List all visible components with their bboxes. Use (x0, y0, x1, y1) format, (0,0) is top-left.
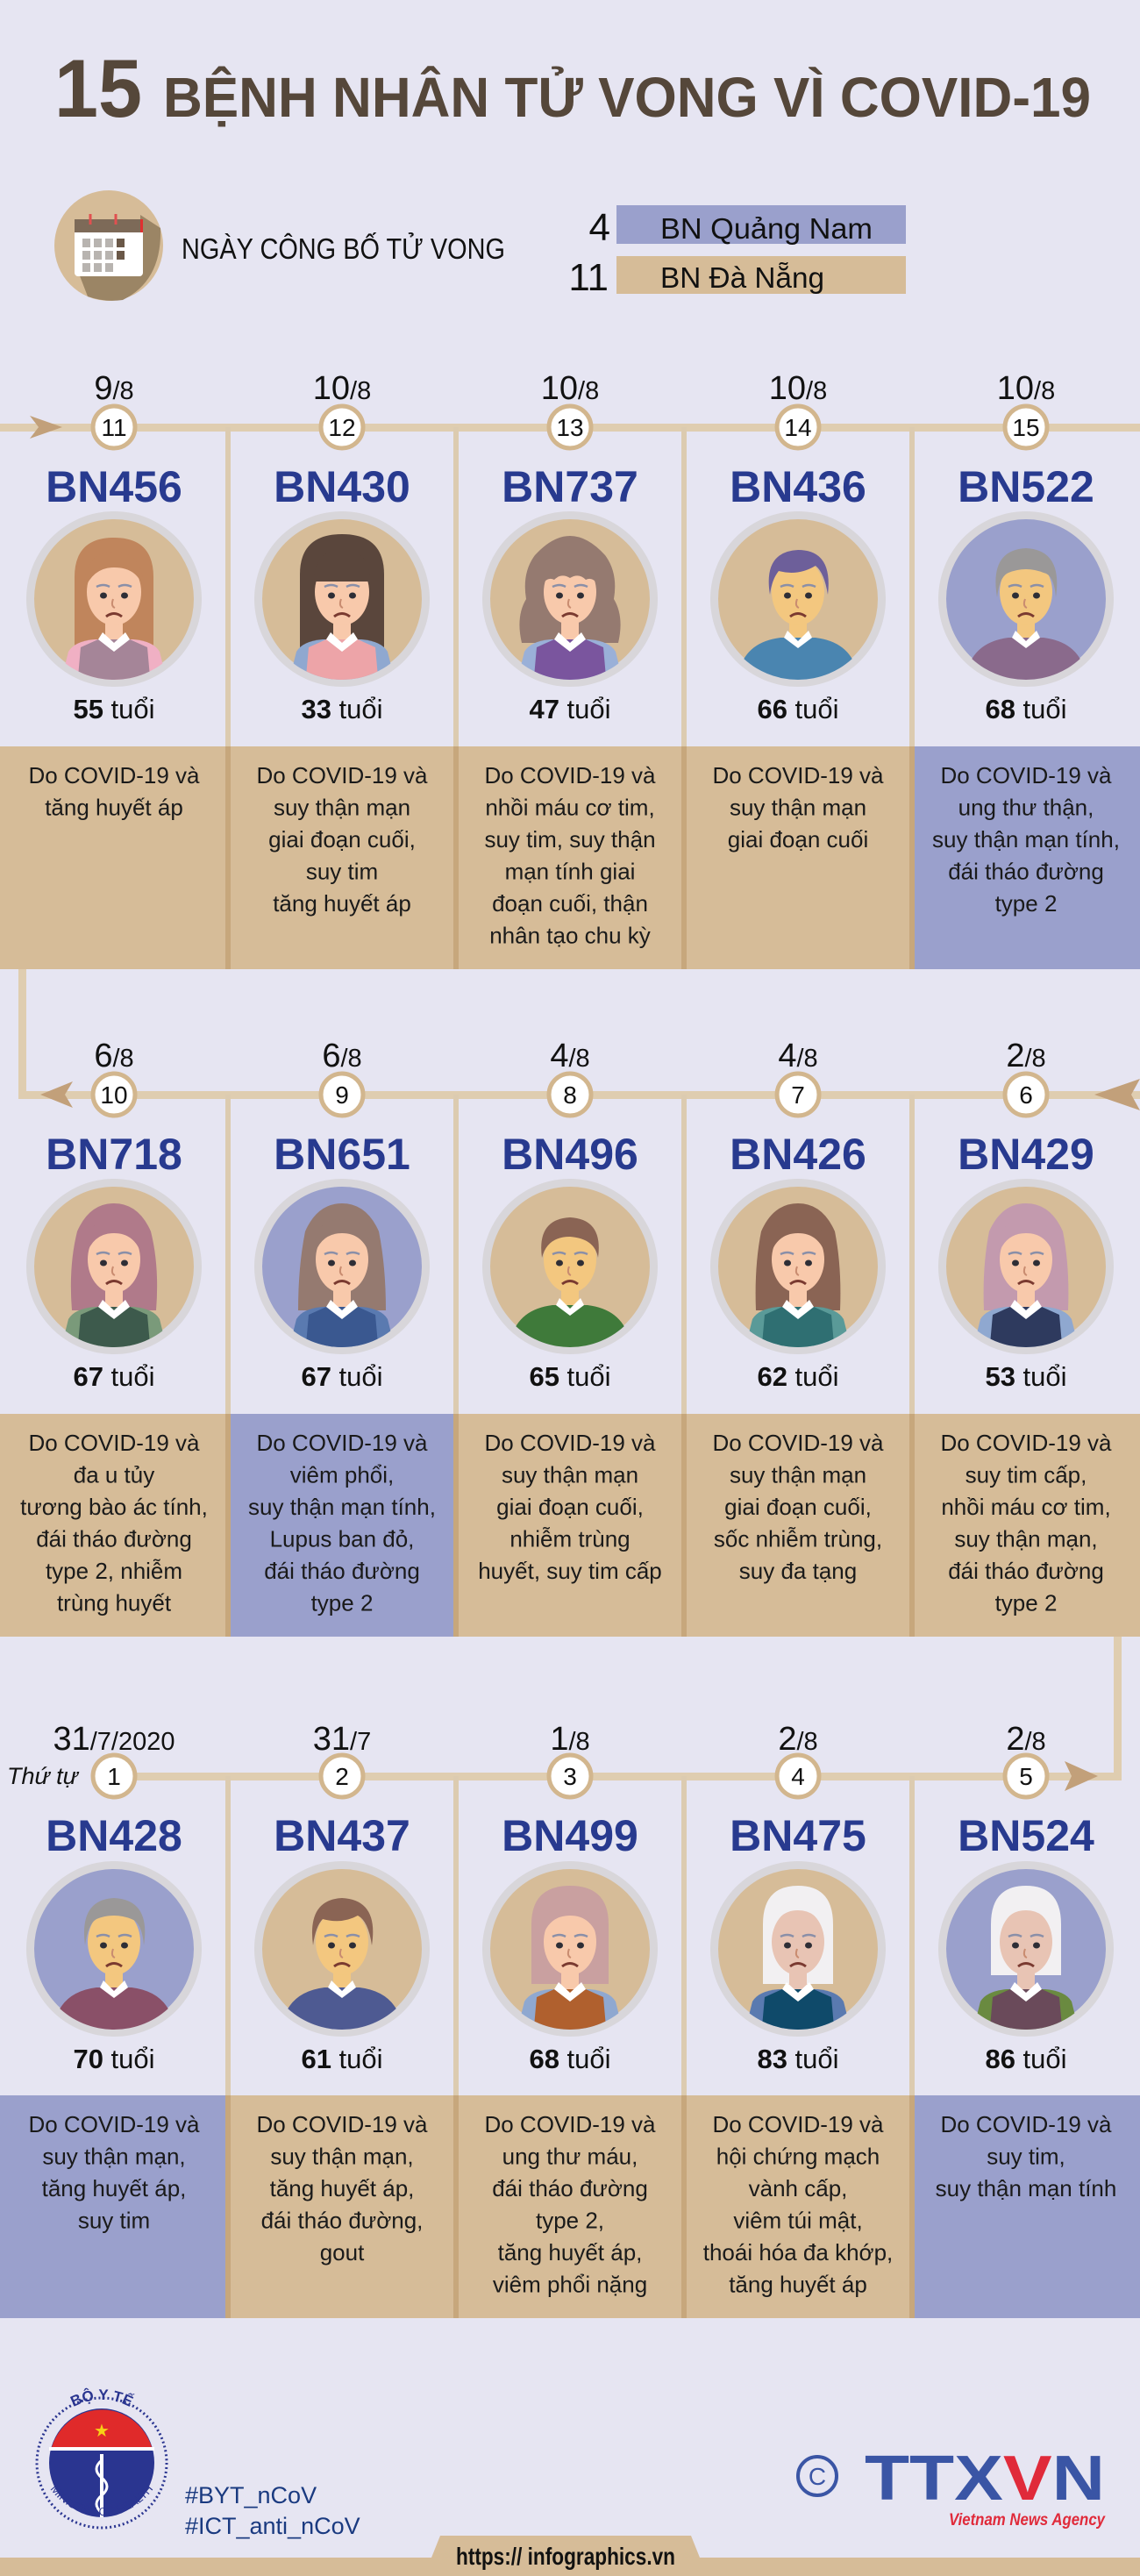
card: BN496: 65 tuổi (529, 1361, 611, 1392)
card: BN456: Do COVID-19 và (28, 762, 200, 788)
card: BN499: type 2, (536, 2207, 604, 2233)
legend: Da Nang: BN Đà Nẵng (660, 261, 824, 294)
card: BN475: vành cấp, (749, 2175, 847, 2201)
legend: Da Nang: 11 (568, 256, 609, 299)
card: BN429: type 2 (995, 1589, 1057, 1616)
card: BN426: suy thận mạn (730, 1461, 866, 1488)
card: BN718: 67 tuổi (73, 1361, 155, 1392)
card: BN429: 6 (1019, 1081, 1033, 1109)
card: BN475: 2/8 (778, 1721, 818, 1758)
card: BN428: 31/7/2020 (53, 1721, 175, 1758)
card: BN475: hội chứng mạch (716, 2144, 880, 2170)
card: BN429 (912, 1038, 1140, 1637)
card: BN430: giai đoạn cuối, (268, 826, 416, 853)
card: BN524: Do COVID-19 và (940, 2111, 1112, 2137)
card: BN429: Do COVID-19 và (940, 1430, 1112, 1456)
avatar (710, 511, 886, 687)
card: BN428: Do COVID-19 và (28, 2111, 200, 2137)
card: BN499: 3 (563, 1763, 577, 1790)
card: BN718: Do COVID-19 và (28, 1430, 200, 1456)
card: BN436: suy thận mạn (730, 795, 866, 821)
card: BN428 (0, 1721, 228, 2318)
card: BN426: Do COVID-19 và (712, 1430, 884, 1456)
card: BN718 (0, 1038, 228, 1637)
box (228, 1414, 456, 1637)
card: BN651: BN651 (274, 1130, 410, 1179)
card: BN522: BN522 (958, 462, 1094, 511)
card: BN475: tăng huyết áp (729, 2272, 867, 2298)
avatar (26, 1179, 202, 1354)
card: BN651: đái tháo đường (264, 1558, 420, 1584)
card: BN737: mạn tính giai (505, 858, 635, 884)
card: BN522: type 2 (995, 890, 1057, 917)
card: BN737 (456, 370, 684, 969)
avatar (938, 1179, 1114, 1354)
card: BN429: nhồi máu cơ tim, (941, 1494, 1111, 1520)
card: BN430: tăng huyết áp (273, 890, 411, 917)
card: BN426: suy đa tạng (739, 1558, 857, 1584)
card: BN718: BN718 (46, 1130, 182, 1179)
card: BN496: 8 (563, 1081, 577, 1109)
card: BN499: 1/8 (550, 1721, 590, 1758)
card: BN737: 10/8 (541, 370, 599, 407)
card: BN430: suy thận mạn (274, 795, 410, 821)
card: BN475: Do COVID-19 và (712, 2111, 884, 2137)
card: BN429: suy thận mạn, (954, 1526, 1098, 1552)
arrow: row 2 left (40, 1081, 73, 1108)
card: BN430: BN430 (274, 462, 410, 511)
card: BN499: viêm phổi nặng (493, 2272, 647, 2298)
legend (54, 190, 906, 301)
card: BN436: Do COVID-19 và (712, 762, 884, 788)
card: BN496: 4/8 (550, 1038, 590, 1074)
card: BN651: 67 tuổi (301, 1361, 383, 1392)
card: BN522: Do COVID-19 và (940, 762, 1112, 788)
avatar (26, 511, 202, 687)
footer: hashtags: #BYT_nCoV (185, 2482, 317, 2508)
column dividers (upper) (225, 427, 915, 2318)
card: BN430: 33 tuổi (301, 694, 383, 724)
card: BN475: viêm túi mật, (733, 2207, 863, 2233)
card: BN737: đoạn cuối, thận (492, 890, 648, 917)
avatar (254, 1861, 430, 2037)
card: BN456: BN456 (46, 462, 182, 511)
card: BN718: type 2, nhiễm (46, 1558, 182, 1584)
card: BN436: 14 (784, 414, 812, 441)
box dividers (225, 746, 915, 2318)
footer: TTXVN logo: TTX VN (865, 2444, 1105, 2514)
avatar (26, 1861, 202, 2037)
card: BN737: nhồi máu cơ tim, (485, 795, 655, 821)
card: BN737: Do COVID-19 và (484, 762, 656, 788)
card: BN651: type 2 (311, 1589, 373, 1616)
card: BN456: 9/8 (94, 370, 134, 407)
footer: TTXVN logo (798, 2444, 1106, 2530)
card: BN651: viêm phổi, (290, 1461, 394, 1488)
card: BN437: đái tháo đường, (261, 2207, 423, 2233)
avatar (710, 1861, 886, 2037)
avatar (254, 511, 430, 687)
card: BN437 (228, 1721, 456, 2318)
box (912, 746, 1140, 969)
title (54, 42, 1091, 134)
card: BN429: 2/8 (1006, 1038, 1046, 1074)
card: BN456: 11 (101, 414, 127, 441)
card: BN428: suy thận mạn, (42, 2144, 186, 2170)
footer: hashtags (185, 2482, 360, 2539)
card: BN737: 47 tuổi (529, 694, 611, 724)
card: BN522: đái tháo đường (948, 858, 1104, 884)
card: BN436: 10/8 (769, 370, 827, 407)
card: BN524: suy thận mạn tính (936, 2175, 1116, 2201)
card: BN437: BN437 (274, 1811, 410, 1860)
box (684, 746, 912, 969)
card: BN651: Do COVID-19 và (256, 1430, 428, 1456)
footer: ministry of health logo (35, 2387, 168, 2530)
avatar (254, 1179, 430, 1354)
card: BN430: 10/8 (313, 370, 371, 407)
card: BN426: BN426 (730, 1130, 866, 1179)
card: BN428: 1 (107, 1763, 121, 1790)
card: BN496 (456, 1038, 684, 1637)
card: BN429: 53 tuổi (985, 1361, 1067, 1392)
card: BN718: đái tháo đường (36, 1526, 192, 1552)
box (228, 746, 456, 969)
card: BN437: gout (320, 2239, 365, 2266)
box (456, 746, 684, 969)
card: BN436: BN436 (730, 462, 866, 511)
footer: ministry of health logo: ★ (94, 2420, 110, 2441)
card: BN456: 55 tuổi (73, 694, 155, 724)
card: BN426: 7 (791, 1081, 805, 1109)
box (228, 2095, 456, 2318)
card: BN437: tăng huyết áp, (270, 2175, 414, 2201)
card: BN426 (684, 1038, 912, 1637)
card: BN499: tăng huyết áp, (498, 2239, 642, 2266)
card: BN524: BN524 (958, 1811, 1094, 1860)
card: BN426: sốc nhiễm trùng, (714, 1526, 882, 1552)
card: BN426: giai đoạn cuối, (724, 1494, 872, 1520)
card: BN475: BN475 (730, 1811, 866, 1860)
card: BN430: 12 (328, 414, 356, 441)
legend: Da Nang (568, 256, 906, 299)
card: BN475: 83 tuổi (757, 2044, 839, 2074)
card: BN522: 68 tuổi (985, 694, 1067, 724)
box (912, 1414, 1140, 1637)
card: BN496: suy thận mạn (502, 1461, 638, 1488)
card: BN429: suy tim cấp, (965, 1461, 1087, 1488)
card: BN499: 68 tuổi (529, 2044, 611, 2074)
card: BN522: ung thư thận, (958, 795, 1094, 821)
card: BN522: 10/8 (997, 370, 1055, 407)
card: BN437: 31/7 (313, 1721, 371, 1758)
card: BN651: Lupus ban đỏ, (270, 1526, 414, 1552)
avatar (482, 1179, 658, 1354)
card: BN426: 62 tuổi (757, 1361, 839, 1392)
card: BN437: 2 (335, 1763, 349, 1790)
legend: Quang Nam (589, 205, 906, 249)
legend label: NGÀY CÔNG BỐ TỬ VONG (182, 232, 505, 265)
avatar (482, 511, 658, 687)
card: BN651: 9 (335, 1081, 349, 1109)
card: BN737: nhân tạo chu kỳ (489, 923, 651, 949)
card: BN651 (228, 1038, 456, 1637)
box (684, 1414, 912, 1637)
card: BN428: tăng huyết áp, (42, 2175, 186, 2201)
card: BN430 (228, 370, 456, 969)
footer: ministry of health logo: BỘ Y TẾ (70, 2387, 135, 2407)
box (0, 2095, 228, 2318)
card: BN475: 4 (791, 1763, 805, 1790)
card: BN428: BN428 (46, 1811, 182, 1860)
box (456, 1414, 684, 1637)
card: BN496: nhiễm trùng (509, 1526, 631, 1552)
card: BN524: 2/8 (1006, 1721, 1046, 1758)
card: BN456 (0, 370, 228, 969)
footer: url bar: https:// infographics.vn (456, 2543, 675, 2570)
title: BỆNH NHÂN TỬ VONG VÌ COVID-19 (163, 65, 1091, 129)
card: BN718: tương bào ác tính, (20, 1494, 208, 1520)
card: BN437: 61 tuổi (301, 2044, 383, 2074)
card: BN475: thoái hóa đa khớp, (703, 2239, 893, 2266)
timeline connectors (0, 424, 1140, 1780)
card: BN737: BN737 (502, 462, 638, 511)
card: BN651: suy thận mạn tính, (248, 1494, 436, 1520)
card: BN522: suy thận mạn tính, (932, 826, 1120, 853)
card: BN426: 4/8 (778, 1038, 818, 1074)
arrow: row 2 incoming (1094, 1079, 1140, 1110)
label: Thu tu: Thứ tự (7, 1763, 80, 1789)
card: BN437: Do COVID-19 và (256, 2111, 428, 2137)
footer: url bar (0, 2536, 1140, 2576)
card: BN651: 6/8 (322, 1038, 362, 1074)
card: BN428: suy tim (78, 2207, 150, 2233)
card: BN524 (912, 1721, 1140, 2318)
card: BN456: tăng huyết áp (45, 795, 183, 821)
card: BN718: trùng huyết (57, 1589, 172, 1616)
avatar (710, 1179, 886, 1354)
card: BN436: giai đoạn cuối (728, 826, 868, 853)
card: BN499: ung thư máu, (502, 2144, 638, 2170)
box (456, 2095, 684, 2318)
card: BN718: đa u tủy (74, 1461, 154, 1488)
arrow: row 3 right (1065, 1761, 1098, 1791)
card: BN499: đái tháo đường (492, 2175, 648, 2201)
card: BN718: 10 (100, 1081, 128, 1109)
card: BN496: BN496 (502, 1130, 638, 1179)
card: BN522 (912, 370, 1140, 969)
avatar (938, 511, 1114, 687)
card: BN524: suy tim, (987, 2144, 1065, 2170)
card: BN428: 70 tuổi (73, 2044, 155, 2074)
avatar (482, 1861, 658, 2037)
card: BN430: Do COVID-19 và (256, 762, 428, 788)
legend: Quang Nam: BN Quảng Nam (660, 212, 873, 245)
icon: calendar (54, 190, 163, 301)
card: BN524: 86 tuổi (985, 2044, 1067, 2074)
box (0, 1414, 228, 1637)
box (684, 2095, 912, 2318)
footer: ministry of health logo: MINISTRY OF HEALTH (51, 2487, 153, 2515)
card: BN436 (684, 370, 912, 969)
card: BN499: Do COVID-19 và (484, 2111, 656, 2137)
card: BN496: Do COVID-19 và (484, 1430, 656, 1456)
card: BN496: huyết, suy tim cấp (478, 1558, 662, 1584)
title: 15 (54, 42, 142, 134)
card: BN737: 13 (556, 414, 584, 441)
arrow: row 1 right (30, 416, 62, 439)
card: BN429: đái tháo đường (948, 1558, 1104, 1584)
card: BN499 (456, 1721, 684, 2318)
card: BN718: 6/8 (94, 1038, 134, 1074)
card: BN475 (684, 1721, 912, 2318)
card: BN429: BN429 (958, 1130, 1094, 1179)
card: BN436: 66 tuổi (757, 694, 839, 724)
card: BN522: 15 (1012, 414, 1040, 441)
card: BN737: suy tim, suy thận (484, 826, 656, 853)
card: BN499: BN499 (502, 1811, 638, 1860)
legend: Quang Nam: 4 (589, 206, 610, 249)
footer: TTXVN logo: C (809, 2463, 826, 2490)
footer: hashtags: #ICT_anti_nCoV (185, 2513, 360, 2539)
box (0, 746, 228, 969)
footer: TTXVN logo: Vietnam News Agency (949, 2511, 1106, 2530)
avatar (938, 1861, 1114, 2037)
card: BN437: suy thận mạn, (270, 2144, 414, 2170)
box (912, 2095, 1140, 2318)
card: BN496: giai đoạn cuối, (496, 1494, 644, 1520)
card: BN430: suy tim (306, 858, 378, 884)
card: BN524: 5 (1019, 1763, 1033, 1790)
